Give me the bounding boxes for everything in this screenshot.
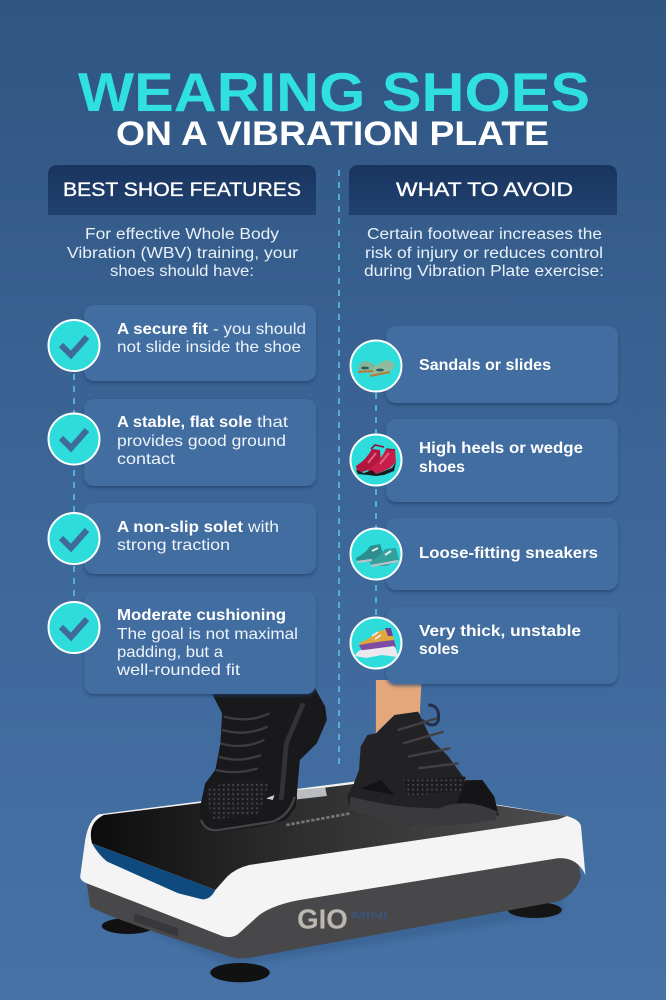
card: stable flat sole: that: [257, 414, 289, 431]
card: sandals: Sandals or slides: [419, 357, 551, 374]
card: non-slip sole: strong traction: [117, 537, 230, 554]
card: moderate cushioning: Moderate cushioning: [117, 607, 286, 624]
timeline connector: right: [375, 393, 377, 620]
icon: loose sneakers: [350, 528, 402, 580]
card: stable flat sole: A stable, flat sole: [117, 414, 252, 431]
title: ON A VIBRATION PLATE: [116, 115, 549, 153]
card: secure fit: [84, 305, 316, 381]
card: secure fit: not slide inside the shoe: [117, 339, 301, 356]
card: secure fit: A secure fit: [117, 321, 209, 338]
card: sandals: [386, 326, 618, 403]
card: high heels: [386, 419, 618, 502]
intro text: what to avoid: during Vibration Plate exercise:: [364, 263, 604, 280]
card: stable flat sole: contact: [117, 451, 176, 468]
icon: check 4: [48, 602, 100, 653]
title: WEARING SHOES: [78, 61, 590, 123]
icon: sandals: [350, 340, 402, 392]
intro text: best features: shoes should have:: [110, 263, 254, 280]
header: best shoe features: BEST SHOE FEATURES: [63, 179, 301, 201]
icon: check 1: [48, 320, 100, 371]
card: loose sneakers: Loose-fitting sneakers: [419, 545, 598, 562]
intro text: best features: For effective Whole Body: [85, 226, 279, 243]
center dashed divider: [338, 170, 340, 770]
icon: check 3: [48, 513, 100, 564]
card: thick soles: [386, 607, 618, 684]
card: moderate cushioning: padding, but a: [117, 644, 223, 661]
intro text: what to avoid: [364, 226, 604, 280]
card: secure fit: - you should: [213, 321, 306, 338]
icon: high heels: [350, 434, 402, 486]
card: non-slip sole: with: [247, 519, 279, 536]
photo: feet on GIO Mini vibration plate: [80, 680, 585, 982]
timeline connector: left: [73, 374, 75, 602]
card: stable flat sole: provides good ground: [117, 433, 286, 450]
card: high heels: High heels or wedge: [419, 440, 583, 457]
icon: thick soles: [350, 618, 402, 668]
card: moderate cushioning: The goal is not maximal: [117, 626, 298, 643]
title: [78, 61, 590, 153]
card: high heels: shoes: [419, 459, 465, 476]
panel: what to avoid: [349, 165, 618, 684]
icon: check 2: [48, 414, 100, 464]
header: best shoe features: [48, 165, 316, 215]
card: non-slip sole: A non-slip solet: [117, 519, 244, 536]
card: stable flat sole: [84, 399, 316, 486]
card: moderate cushioning: well-rounded fit: [116, 662, 241, 679]
card: thick soles: soles: [419, 641, 459, 658]
intro text: what to avoid: Certain footwear increases the: [367, 226, 602, 243]
intro text: what to avoid: risk of injury or reduces control: [365, 245, 603, 262]
intro text: best features: [67, 226, 298, 280]
panel: best shoe features: [48, 165, 316, 694]
header: what to avoid: WHAT TO AVOID: [396, 179, 573, 201]
photo: feet on GIO Mini vibration plate: MINI: [351, 911, 388, 922]
card: thick soles: Very thick, unstable: [419, 623, 581, 640]
intro text: best features: Vibration (WBV) training, your: [67, 245, 298, 262]
card: moderate cushioning: [84, 592, 316, 694]
card: non-slip sole: [84, 503, 316, 574]
card: loose sneakers: [386, 518, 618, 590]
header: what to avoid: [349, 165, 617, 215]
photo: feet on GIO Mini vibration plate: GIO: [297, 903, 348, 934]
